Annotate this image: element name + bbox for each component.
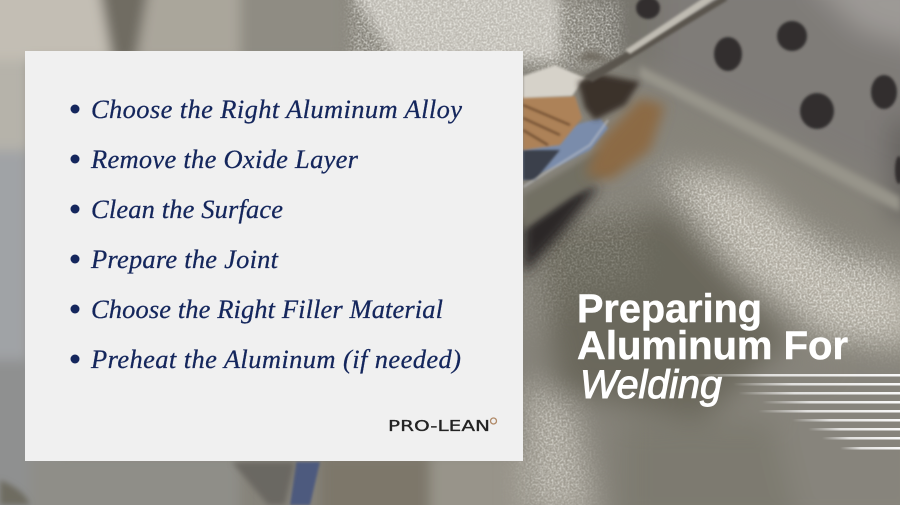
- item: Remove the Oxide Layer: Remove the Oxide Layer: [90, 144, 359, 174]
- title: Aluminum For: [577, 324, 848, 368]
- title: Preparing: [577, 287, 762, 331]
- speckled metal texture: [344, 0, 900, 505]
- item: Clean the Surface: Clean the Surface: [91, 194, 283, 224]
- perforation holes: [636, 0, 900, 184]
- pipe upper edge: [640, 66, 900, 212]
- checklist: [70, 94, 462, 374]
- panel: preparation checklist: [25, 51, 523, 461]
- welding rod: [585, 0, 728, 82]
- decorative speed lines: [693, 374, 900, 450]
- dark weld shadow: [523, 185, 600, 275]
- item: Choose the Right Filler Material: Choose the Right Filler Material: [91, 294, 443, 324]
- lower seam: [290, 462, 320, 505]
- item: Choose the Right Aluminum Alloy: Choose the Right Aluminum Alloy: [91, 94, 462, 124]
- title: [577, 287, 848, 407]
- title: Welding: [580, 363, 722, 407]
- item: Prepare the Joint: Prepare the Joint: [90, 244, 279, 274]
- left wall tones: [0, 0, 30, 150]
- item: Preheat the Aluminum (if needed): Preheat the Aluminum (if needed): [90, 344, 461, 374]
- logo: PRO-LEAN: PRO-LEAN: [388, 417, 490, 435]
- weld pool: [523, 50, 640, 187]
- rust heat mark: [585, 98, 665, 180]
